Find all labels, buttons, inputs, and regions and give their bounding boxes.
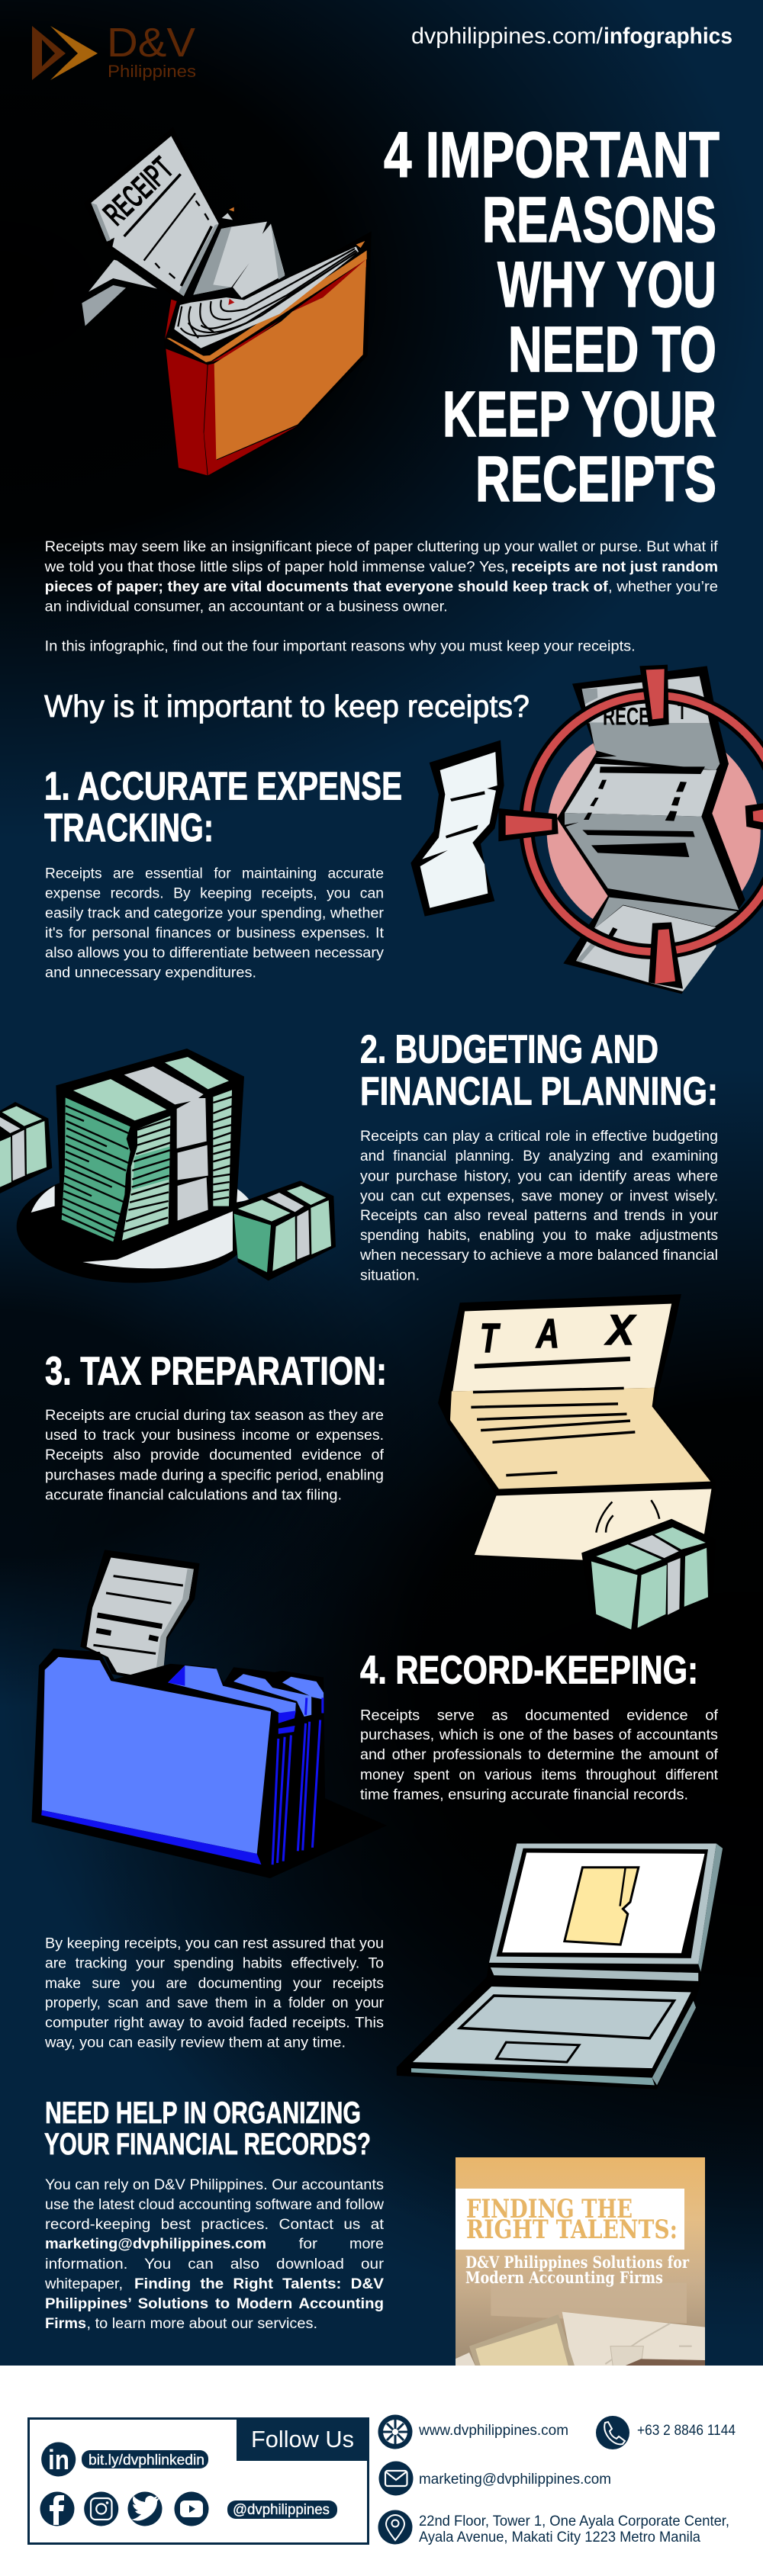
body 4: Receipts serve as documented evidence of: [360, 1707, 719, 1723]
heading: why is it important: Why is it important to keep receipts?: [44, 689, 530, 724]
icon: blue folder with receipt: [31, 1550, 387, 1878]
icon: instagram: [84, 2492, 118, 2526]
body 4: purchases, which is one of the bases of accountants: [360, 1727, 718, 1743]
closing paragraph: [44, 1935, 385, 2051]
footer: contact details: [378, 2414, 736, 2545]
text: RECEIPT on target paper: RECE: [603, 703, 650, 731]
icon: phone: [596, 2416, 629, 2449]
intro text: In this infographic, find out the four important reasons why you must keep your receipts.: [45, 639, 636, 654]
need help body: more: [349, 2237, 384, 2253]
intro text: , whether you’re: [608, 579, 718, 595]
email: marketing@dvphilippines.com: [419, 2472, 611, 2488]
body 3: Receipts also provide documented evidence of: [45, 1447, 385, 1463]
need help body: Finding the Right Talents: D&V: [134, 2276, 384, 2292]
logo: D&V Philippines: [32, 20, 196, 81]
body 1: easily track and categorize your spending, whether: [45, 905, 385, 921]
need help body: record-keeping best practices. Contact us at: [45, 2217, 385, 2233]
social handle: @dvphilippines: [233, 2502, 330, 2518]
heading 1: TRACKING:: [44, 806, 214, 850]
body 1: [45, 866, 385, 981]
icon: receipt going into orange book: [82, 127, 372, 477]
address: Ayala Avenue, Makati City 1223 Metro Manila: [419, 2529, 700, 2545]
body 2: Receipts can play a critical role in effective budgeting: [360, 1129, 718, 1145]
icon: youtube: [174, 2492, 209, 2526]
logo: D&V Philippines: Philippines: [108, 62, 196, 81]
body 3: used to track your business income or expenses.: [45, 1428, 384, 1444]
icon: twitter: [128, 2492, 162, 2526]
logo: D&V Philippines: D&V: [107, 20, 195, 66]
body 2: and financial planning. By analyzing and examining: [360, 1148, 718, 1164]
icon: website globe: [378, 2414, 412, 2449]
whitepaper cover: D&V Philippines Solutions for: [465, 2253, 690, 2272]
url: infographics: [604, 24, 732, 49]
url: dvphilippines.com/: [411, 24, 604, 49]
intro text: pieces of paper; they are vital documents that everyone should keep track of: [45, 579, 608, 595]
need help body: You can rely on D&V Philippines. Our accountants: [45, 2177, 384, 2193]
body 2: you can cut expenses, save money or invest wisely.: [360, 1188, 718, 1204]
body 1: Receipts are essential for maintaining accurate: [45, 866, 384, 882]
need help body: Philippines’ Solutions to Modern Accounting: [45, 2296, 384, 2312]
need help body: whitepaper,: [44, 2276, 123, 2292]
body 1: it's for personal finances or business expenses. It: [45, 925, 385, 941]
body 3: accurate financial calculations and tax filing.: [45, 1487, 342, 1503]
need help body: information. You can also download our: [45, 2256, 385, 2272]
text: TAX: X: [604, 1306, 637, 1354]
body 4: money spent on various items throughout different: [360, 1768, 719, 1784]
icon: tax document with money bundle: [438, 1294, 716, 1633]
intro text: we told you that those little slips of paper hold immense value? Yes,: [44, 559, 509, 575]
heading: need help: [44, 2096, 371, 2161]
need help body: use the latest cloud accounting software and follow: [45, 2197, 384, 2213]
section 2: budgeting and financial planning: [359, 1028, 719, 1283]
icon: facebook: [40, 2492, 75, 2526]
need help body: marketing@dvphilippines.com: [45, 2237, 266, 2253]
intro text: [44, 539, 718, 654]
closing paragraph: By keeping receipts, you can rest assured that you: [45, 1935, 384, 1952]
need help body: [44, 2177, 385, 2332]
closing paragraph: computer right away to avoid faded receipts. This: [45, 2016, 384, 2032]
follow us label: Follow Us: [251, 2426, 354, 2452]
body 3: Receipts are crucial during tax season as they are: [45, 1408, 384, 1424]
section 4: record-keeping: [360, 1649, 719, 1803]
heading 2: 2. BUDGETING AND: [360, 1028, 658, 1072]
heading 3: 3. TAX PREPARATION:: [45, 1349, 387, 1393]
section 3: tax preparation: [45, 1349, 387, 1503]
whitepaper cover: [456, 2157, 705, 2366]
whitepaper cover: RIGHT TALENTS:: [466, 2215, 678, 2245]
icon: crumpled receipt in target crosshair: [410, 665, 763, 994]
text: TAX: [480, 1306, 637, 1361]
closing paragraph: properly, scan and save them in a folder on your: [45, 1996, 385, 2012]
icon: stacks of money: [0, 1049, 336, 1283]
body 1: and unnecessary expenditures.: [45, 965, 256, 981]
heading 1: [44, 765, 402, 850]
body 2: situation.: [360, 1267, 420, 1283]
intro text: receipts are not just random: [511, 559, 718, 575]
body 3: purchases made during a specific period, enabling: [45, 1467, 384, 1483]
closing paragraph: way, you can easily review them at any time.: [44, 2035, 346, 2051]
text: RECEIPT: RECEIPT: [96, 150, 181, 233]
icon: mail: [378, 2462, 414, 2495]
body 3: [45, 1408, 385, 1503]
closing paragraph: are tracking your spending habits effectively. To: [45, 1955, 384, 1971]
address: [419, 2513, 729, 2545]
icon: linkedin: in: [48, 2444, 69, 2475]
body 2: when necessary to achieve a more balanced financial: [359, 1248, 718, 1264]
body 2: spending habits, enabling you to make adjustments: [360, 1228, 718, 1244]
heading 2: [360, 1028, 718, 1113]
text: TAX: A: [535, 1311, 559, 1357]
heading 1: 1. ACCURATE EXPENSE: [44, 765, 402, 809]
body 4: [360, 1707, 719, 1803]
heading: need help: YOUR FINANCIAL RECORDS?: [44, 2128, 371, 2161]
body 2: your purchase history, you can identify areas where: [360, 1168, 718, 1185]
body 2: [359, 1129, 719, 1283]
url: [411, 24, 732, 49]
body 1: expense records. By keeping receipts, you can: [45, 885, 384, 901]
whitepaper cover: Modern Accounting Firms: [465, 2268, 663, 2287]
icon: laptop with folder on screen: [397, 1843, 723, 2089]
whitepaper cover: FINDING THE: [466, 2194, 633, 2224]
body 4: and other professionals to determine the amount of: [360, 1747, 719, 1763]
intro text: an individual consumer, an accountant or a business owner.: [45, 599, 448, 615]
need help body: Firms: [45, 2316, 86, 2332]
closing paragraph: make sure you are documenting your receipts: [45, 1976, 384, 1992]
text: TAX: T: [480, 1315, 501, 1361]
icon: linkedin: [41, 2442, 76, 2477]
heading: need help: NEED HELP IN ORGANIZING: [45, 2096, 361, 2130]
body 2: Receipts can also reveal patterns and trends in your: [360, 1208, 719, 1224]
need help body: , to learn more about our services.: [87, 2316, 317, 2332]
section 1: accurate expense tracking: [44, 765, 402, 981]
text: RECEIPT on target paper: T: [678, 699, 687, 724]
title: [384, 119, 720, 515]
address: 22nd Floor, Tower 1, One Ayala Corporate Center,: [419, 2513, 729, 2529]
need help body: for: [299, 2237, 318, 2253]
website: www.dvphilippines.com: [418, 2423, 568, 2439]
phone number: +63 2 8846 1144: [637, 2423, 736, 2439]
footer: follow us panel: [29, 2417, 369, 2544]
body 4: time frames, ensuring accurate financial records.: [360, 1787, 688, 1803]
icon: location pin: [378, 2510, 412, 2544]
body 1: also allows you to differentiate between necessary: [45, 946, 385, 961]
linkedin handle: bit.ly/dvphlinkedin: [89, 2452, 204, 2468]
intro text: Receipts may seem like an insignificant piece of paper cluttering up your wallet or purse. But what if: [45, 539, 718, 555]
